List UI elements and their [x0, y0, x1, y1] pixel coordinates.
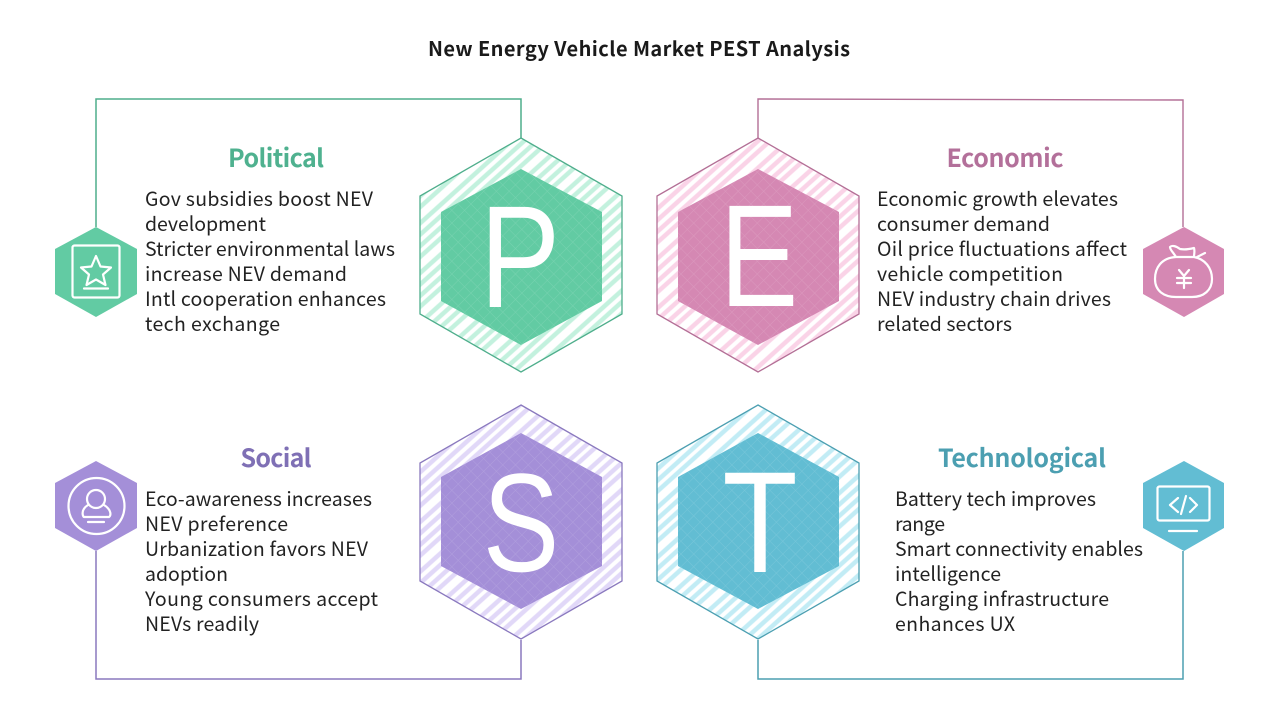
icon: certificate star	[55, 227, 137, 317]
heading: economic: Economic	[946, 139, 1064, 175]
hexagon: E	[657, 138, 859, 372]
text: technological points: Battery tech improves	[895, 483, 1096, 512]
panel: political	[55, 99, 622, 372]
text: social points: NEV preference	[145, 508, 288, 537]
frame: technological	[758, 551, 1183, 679]
heading: technological: Technological	[938, 439, 1106, 475]
hexagon: P: P	[480, 176, 560, 339]
text: social points: Eco-awareness increases	[145, 483, 372, 512]
text: technological points: range	[895, 508, 945, 537]
text: economic points: related sectors	[877, 308, 1012, 337]
text: economic points: vehicle competition	[877, 258, 1063, 287]
text: social points: Urbanization favors NEV	[145, 533, 369, 562]
icon: money bag	[1143, 227, 1224, 317]
icon: person	[55, 461, 137, 551]
panel: economic	[657, 99, 1224, 372]
text: economic points: Economic growth elevates	[877, 183, 1118, 212]
heading: social: Social	[240, 439, 312, 475]
text: political points: increase NEV demand	[145, 258, 347, 287]
text: political points: development	[145, 208, 267, 237]
panel: technological	[657, 405, 1224, 679]
text: political points: Gov subsidies boost NEV	[145, 183, 374, 212]
frame: social	[96, 551, 521, 679]
frame: economic	[758, 99, 1183, 227]
text: social points	[144, 483, 379, 637]
text: social points: Young consumers accept	[144, 583, 379, 612]
text: technological points: Charging infrastructure	[895, 583, 1109, 612]
frame: political	[96, 99, 521, 227]
hexagon: E: E	[720, 175, 798, 338]
icon: code monitor	[1143, 461, 1224, 551]
hexagon: S	[420, 405, 622, 639]
hexagon: T: T	[722, 443, 798, 603]
text: technological points: intelligence	[895, 558, 1001, 587]
hexagon: T	[657, 405, 859, 639]
text: political points	[145, 183, 395, 337]
text: political points: tech exchange	[145, 308, 280, 337]
heading: political: Political	[228, 139, 324, 175]
text: economic points: Oil price fluctuations affect	[877, 233, 1128, 262]
title: New Energy Vehicle Market PEST Analysis	[428, 33, 850, 62]
text: economic points	[877, 183, 1128, 337]
hexagon: S: S	[483, 445, 559, 602]
text: economic points: NEV industry chain drives	[877, 283, 1111, 312]
text: political points: Stricter environmental laws	[145, 233, 395, 262]
text: social points: adoption	[145, 558, 228, 587]
text: economic points: consumer demand	[877, 208, 1050, 237]
hexagon: P	[420, 138, 622, 372]
text: political points: Intl cooperation enhances	[145, 283, 386, 312]
text: technological points	[895, 483, 1143, 637]
text: technological points: enhances UX	[895, 608, 1015, 637]
panel: social	[55, 405, 622, 679]
text: technological points: Smart connectivity enables	[895, 533, 1143, 562]
text: social points: NEVs readily	[145, 608, 259, 637]
